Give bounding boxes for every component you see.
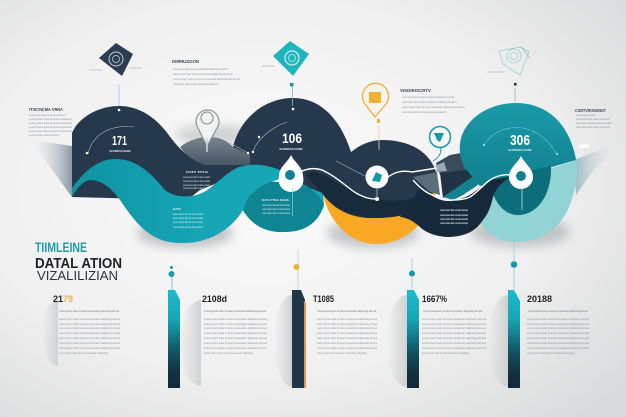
column 1: Lorem ipsum dolor sit amet consectetur adipiscing elit sed [59, 317, 120, 321]
inner dark teal [490, 166, 551, 215]
bar 3 [407, 258, 419, 388]
white flow line [300, 168, 510, 200]
text on teal wave: Lorem ipsum dolor sit amet consect [173, 225, 203, 229]
column 4: Lorem ipsum dolor sit amet consectetur adipiscing elit sed [422, 326, 486, 330]
text block: top left: Lorem ipsum dolor sit amet consectetur adipiscing elit sed do [173, 72, 233, 76]
text block: left [29, 107, 72, 137]
column 5: Lorem ipsum dolor sit amet consectetur adipiscing elit sed [527, 346, 589, 350]
column 3: Lorem ipsum dolor sit amet consectetur adipiscing elit sed [317, 309, 376, 313]
column 2: Lorem ipsum dolor sit amet consectetur adipiscing elit sed [204, 317, 267, 321]
column 1 [42, 294, 120, 366]
column 4: Lorem ipsum dolor sit amet consectetur adipiscing elit sed [422, 317, 486, 321]
bar 2 [292, 250, 306, 388]
column 5: Lorem ipsum dolor sit amet consectetur adipiscing elit sed [527, 322, 589, 326]
column 1: Lorem ipsum dolor sit amet consectetur adipiscing elit sed [59, 322, 120, 326]
text block: top right middle [400, 88, 465, 114]
column 1: 2179 [53, 294, 73, 304]
column 2: Lorem ipsum dolor sit amet consectetur adipiscing elit sed [204, 309, 266, 313]
column 4: Lorem ipsum dolor sit amet consectetur adipiscing [422, 351, 469, 355]
connector nodes [86, 108, 558, 155]
value 306: 306 [510, 132, 530, 149]
text block: top right middle: VISDIRISCRTV [400, 88, 431, 93]
title: VIZALILIZIAN [37, 269, 118, 283]
column 3: Lorem ipsum dolor sit amet consectetur adipiscing elit sed [317, 346, 377, 350]
text on teal wave: Lorem ipsum dolor sit amet consect [173, 212, 203, 216]
orange lobe [322, 190, 436, 244]
text block: left: Lorem ipsum dolor sit amet consectetur [29, 113, 66, 117]
column 2: Lorem ipsum dolor sit amet consectetur adipiscing elit sed [204, 331, 267, 335]
label 171: BUSINESS NAME [110, 149, 131, 153]
column 1: Lorem ipsum dolor sit amet consectetur adipiscing elit sed [59, 346, 120, 350]
column 5: 20188 [527, 294, 552, 304]
label 306: BUSINESS NAME [508, 148, 532, 152]
column 3 [274, 294, 377, 387]
text block: right: CONTVRONGNGT [575, 108, 606, 113]
text on dark lobe: Lorem ipsum dolor sit amet consect [440, 213, 468, 217]
value 171: 171 [112, 133, 127, 148]
column 2 [180, 294, 267, 386]
column 5 [488, 294, 589, 387]
title: DATAL ATION [35, 256, 122, 272]
column 5: Lorem ipsum dolor sit amet consectetur adipiscing elit sed [527, 326, 589, 330]
white circle marker [366, 166, 388, 198]
text block: left: Lorem ipsum dolor sit amet consectetur [29, 125, 72, 129]
text block: top right middle: Lorem ipsum dolor sit amet consectetur adipiscing elit sed do [402, 95, 454, 99]
text block: left: Lorem ipsum dolor sit amet [29, 133, 59, 137]
text block: top left: Lorem ipsum dolor sit amet consectetur adipiscing elit sed do [173, 77, 240, 81]
text on dark wave: Lorem ipsum dolor sit amet consect [183, 183, 210, 187]
text on teal wave [173, 207, 203, 229]
text on middle teal circle: Lorem ipsum dolor sit amet consect [262, 207, 290, 211]
column 4: Lorem ipsum dolor sit amet consectetur adipiscing elit sed [422, 336, 486, 340]
text on dark wave: DATA TITLE [186, 170, 208, 174]
small grey facets behind teal circle [436, 153, 468, 175]
column 4: Lorem ipsum dolor sit amet consectetur adipiscing elit sed [423, 309, 482, 313]
text block: top left: DMRIUSGON [172, 59, 199, 64]
white drop marker left [278, 155, 304, 216]
column 5: Lorem ipsum dolor sit amet consectetur adipiscing elit sed [527, 336, 589, 340]
text block: top left: Lorem ipsum dolor sit amet consectetur adipiscing [173, 82, 218, 86]
column 5: Lorem ipsum dolor sit amet consectetur adipiscing elit sed [528, 309, 588, 313]
text on teal wave: Lorem ipsum dolor sit amet consect [173, 220, 203, 224]
value 106: 106 [282, 130, 302, 146]
text on dark lobe: Lorem ipsum dolor sit amet consect [440, 221, 468, 225]
icon: orange pin marker [363, 83, 389, 150]
column 4: Lorem ipsum dolor sit amet consectetur adipiscing elit sed [422, 331, 486, 335]
column 5: Lorem ipsum dolor sit amet consectetur adipiscing elit sed [527, 341, 589, 345]
column 4 [387, 294, 486, 387]
text block: left: Lorem ipsum dolor sit amet consectetur [29, 129, 72, 133]
column 5: Lorem ipsum dolor sit amet consectetur adipiscing [527, 351, 575, 355]
text on middle teal circle: Lorem ipsum dolor sit amet consect [262, 203, 290, 207]
text block: right: Lorem ipsum dolor sit amet consectetur [576, 121, 612, 125]
right teal circle [460, 103, 576, 186]
column 2: Lorem ipsum dolor sit amet consectetur adipiscing elit sed [204, 322, 267, 326]
column 1: Lorem ipsum dolor sit amet consectetur adipiscing elit sed [59, 336, 120, 340]
column 1: Lorem ipsum dolor sit amet consectetur adipiscing elit sed [59, 309, 119, 313]
text block: left: ITVICNCMA VRNA [29, 107, 63, 112]
text on dark wave: Lorem ipsum dolor sit amet consect [183, 186, 210, 190]
column 2: Lorem ipsum dolor sit amet consectetur adipiscing elit sed [204, 346, 267, 350]
icon: outline marker [487, 47, 530, 102]
column 4: Lorem ipsum dolor sit amet consectetur adipiscing elit sed [422, 346, 486, 350]
column 3: Lorem ipsum dolor sit amet consectetur adipiscing elit sed [317, 322, 377, 326]
column 2: Lorem ipsum dolor sit amet consectetur adipiscing elit sed [204, 341, 267, 345]
column 4: Lorem ipsum dolor sit amet consectetur adipiscing elit sed [422, 341, 486, 345]
dark lobe under right line [400, 177, 510, 237]
light teal circle [478, 160, 577, 242]
column 1: Lorem ipsum dolor sit amet consectetur adipiscing elit sed [59, 326, 120, 330]
bar 4 [508, 240, 520, 388]
bar 1 [168, 266, 180, 388]
wave chart [30, 98, 620, 248]
title: TIIMLEINE [35, 239, 87, 255]
text block: top right middle: Lorem ipsum dolor sit amet consectetur adipiscing [402, 110, 446, 114]
column 5: Lorem ipsum dolor sit amet consectetur adipiscing elit sed [527, 331, 589, 335]
text on dark wave: Lorem ipsum dolor sit amet consect [183, 175, 210, 179]
teal circle middle [240, 180, 324, 232]
icon: grey pin marker [196, 110, 219, 152]
text on teal wave: DATA [173, 207, 181, 211]
column 2: 2108d [202, 294, 227, 304]
text block: top left: Lorem ipsum dolor sit amet consectetur adipiscing elit sed do [173, 67, 228, 71]
dark band under flow line [306, 170, 433, 218]
text on middle teal circle: Lorem ipsum dolor sit amet consect [262, 211, 290, 215]
text on dark lobe: Lorem ipsum dolor sit amet consect [440, 217, 468, 221]
text block: left: Lorem ipsum dolor sit amet consectetur [29, 121, 72, 125]
text on dark wave [183, 170, 210, 190]
icon: cloud [578, 144, 589, 148]
title [35, 239, 122, 283]
column 2: Lorem ipsum dolor sit amet consectetur adipiscing elit sed [204, 336, 267, 340]
column 5: Lorem ipsum dolor sit amet consectetur adipiscing elit sed [527, 317, 589, 321]
line end dot [375, 197, 379, 201]
teal main wave [72, 159, 324, 243]
text on teal wave: Lorem ipsum dolor sit amet consect [173, 216, 203, 220]
icon: teal diamond marker [262, 41, 309, 106]
column 3: T1085 [313, 294, 334, 304]
dark main wave [72, 98, 436, 218]
column 3: Lorem ipsum dolor sit amet consectetur adipiscing elit sed [317, 326, 377, 330]
column 3: Lorem ipsum dolor sit amet consectetur adipiscing elit sed [317, 331, 377, 335]
connector lines [88, 122, 365, 176]
column 2: Lorem ipsum dolor sit amet consectetur adipiscing [204, 351, 253, 355]
grey facet [413, 172, 440, 195]
column 3: Lorem ipsum dolor sit amet consectetur adipiscing elit sed [317, 336, 377, 340]
column 4: Lorem ipsum dolor sit amet consectetur adipiscing elit sed [422, 322, 486, 326]
text block: top right middle: Lorem ipsum dolor sit amet consectetur adipiscing elit sed do [402, 100, 457, 104]
column 1: Lorem ipsum dolor sit amet consectetur adipiscing [59, 351, 108, 355]
column 1: Lorem ipsum dolor sit amet consectetur adipiscing elit sed [59, 341, 120, 345]
column 1: Lorem ipsum dolor sit amet consectetur adipiscing elit sed [59, 331, 120, 335]
column 2: Lorem ipsum dolor sit amet consectetur adipiscing elit sed [204, 326, 267, 330]
text on dark wave: Lorem ipsum dolor sit amet consect [183, 179, 210, 183]
column 3: Lorem ipsum dolor sit amet consectetur adipiscing elit sed [317, 317, 377, 321]
white drop marker right [509, 156, 533, 210]
label 106: BUSINESS NAME [280, 147, 303, 151]
text on dark lobe [440, 208, 468, 225]
grey hill [180, 137, 250, 172]
right fading panel [574, 142, 620, 195]
teal facet [443, 177, 478, 200]
text block: top left [172, 59, 240, 86]
text block: right [575, 108, 612, 129]
icon: dark diamond marker [90, 43, 142, 106]
dark facet [440, 170, 473, 198]
column 3: Lorem ipsum dolor sit amet consectetur adipiscing elit sed [317, 341, 377, 345]
column 4: 1667% [422, 294, 447, 304]
icon: teal pin marker [430, 126, 450, 161]
text block: top right middle: Lorem ipsum dolor sit amet consectetur adipiscing elit sed do [402, 105, 465, 109]
text block: left: Lorem ipsum dolor sit amet consectetur [29, 117, 72, 121]
text on middle teal circle: DATA TITLE NAME [262, 198, 289, 202]
text on dark lobe: Lorem ipsum dolor sit amet consect [440, 208, 468, 212]
left fading panel [30, 140, 72, 197]
text on middle teal circle [262, 198, 290, 215]
text block: right: Lorem ipsum dolor [576, 113, 596, 117]
text block: right: Lorem ipsum dolor sit amet consectetur [576, 117, 610, 121]
column 3: Lorem ipsum dolor sit amet consectetur adipiscing [317, 351, 367, 355]
text block: right: Lorem ipsum dolor sit amet consectetur [576, 125, 610, 129]
arc over 306 [484, 128, 557, 155]
